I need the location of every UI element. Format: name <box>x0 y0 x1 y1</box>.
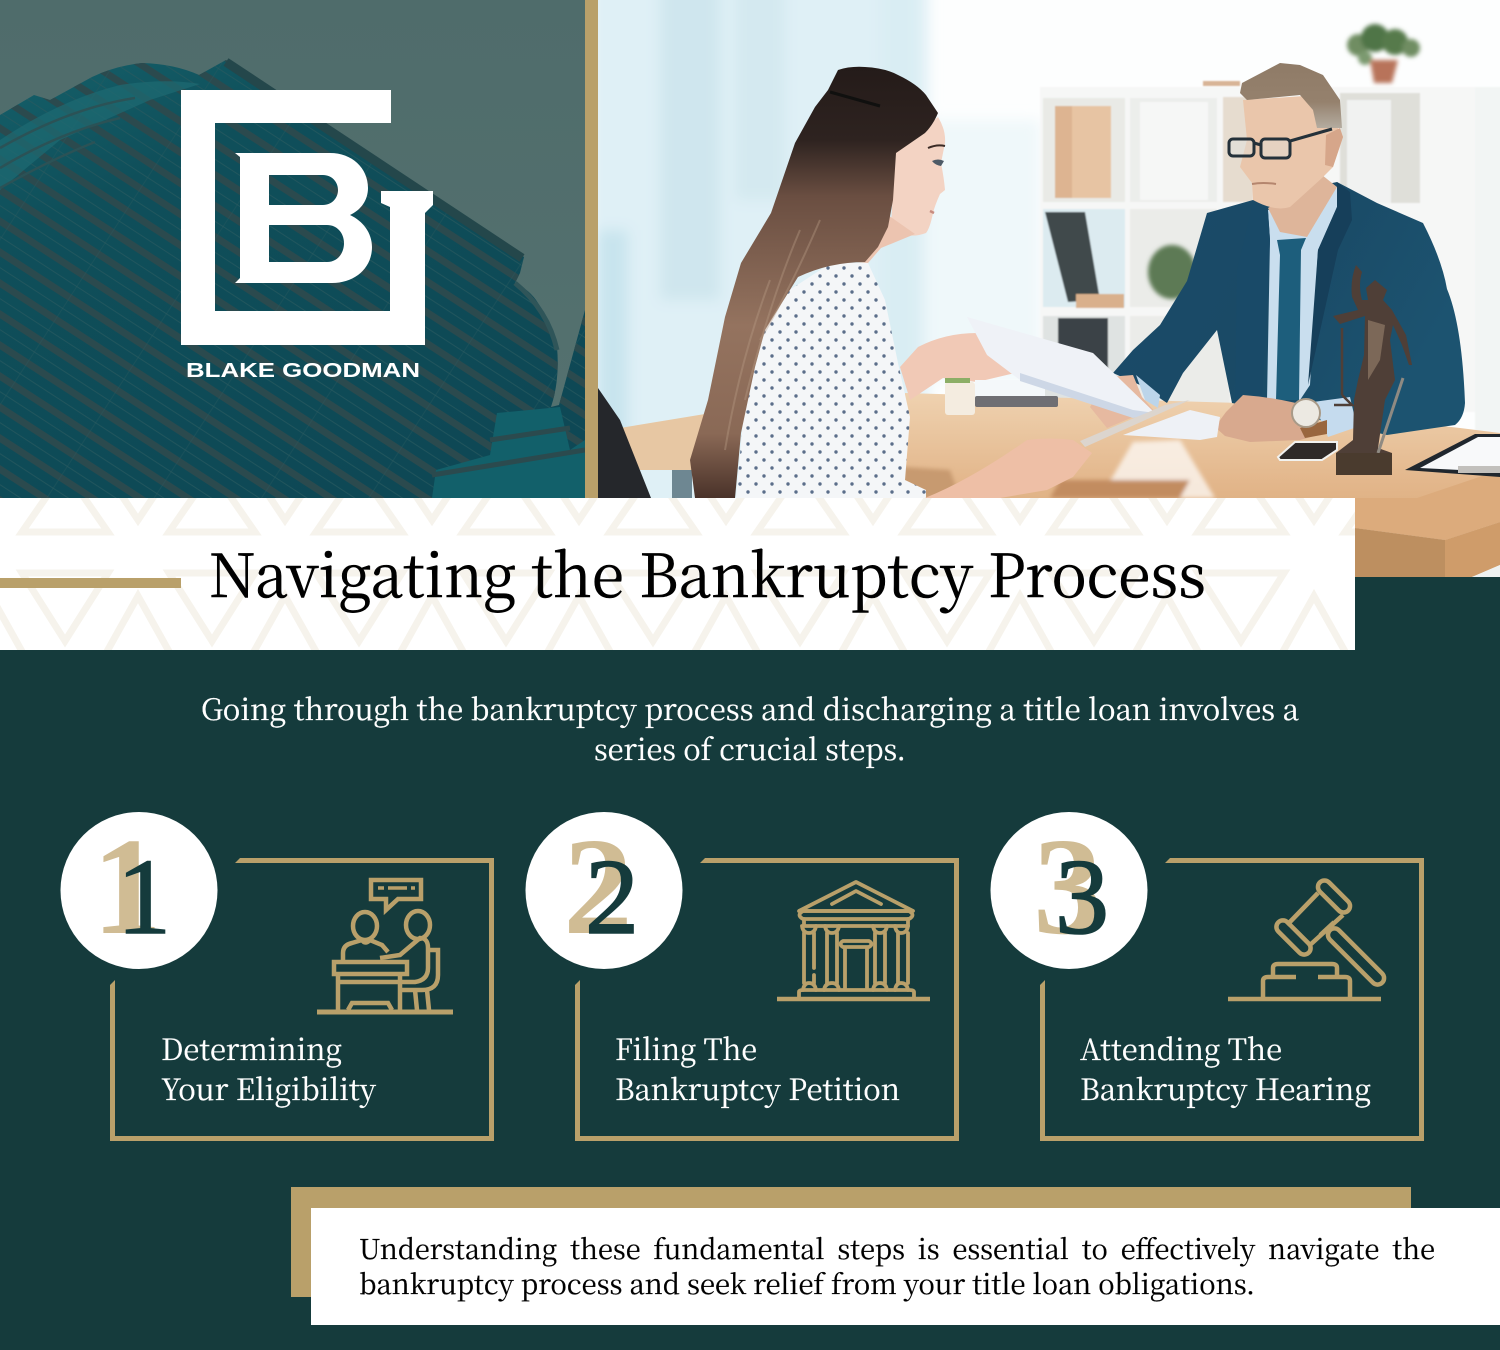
step 3 label: Bankruptcy Hearing <box>1080 1067 1371 1109</box>
summary text <box>359 1227 1435 1302</box>
face <box>891 117 945 236</box>
icon: meeting at desk <box>317 880 453 1012</box>
cup and laptop <box>945 378 1058 415</box>
step 1: determining eligibility <box>60 810 494 1141</box>
plant <box>1347 24 1420 83</box>
step 2 label: Bankruptcy Petition <box>615 1067 900 1109</box>
clipboard <box>1405 434 1500 477</box>
glasses <box>1229 129 1332 158</box>
documents <box>976 333 1220 447</box>
bookshelf <box>1040 81 1500 437</box>
number circle 1: 1 <box>92 810 162 964</box>
chair <box>598 388 651 498</box>
number circle 3: 3 <box>1055 838 1109 957</box>
step 2 label <box>615 1027 900 1109</box>
bush <box>1148 245 1196 299</box>
hair <box>690 67 938 498</box>
title: Navigating the Bankruptcy Process <box>209 529 1206 615</box>
number circle 2: 2 <box>563 810 633 964</box>
triangle pattern <box>0 498 1355 650</box>
hair <box>1240 63 1342 128</box>
summary text: Understanding these fundamental steps is essential to effectively navigate the <box>359 1227 1435 1267</box>
step 1 label: Your Eligibility <box>161 1067 377 1109</box>
callout: summary <box>291 1187 1500 1325</box>
cuff <box>1316 397 1354 437</box>
intro text: Going through the bankruptcy process and discharging a title loan involves a <box>201 687 1300 729</box>
hand on papers <box>1090 375 1155 428</box>
frame 1 <box>110 858 494 1141</box>
statue of justice <box>1333 265 1412 475</box>
panel: office photo <box>590 0 1500 577</box>
summary text: bankruptcy process and seek relief from your title loan obligations. <box>359 1262 1255 1302</box>
frame 2 <box>575 858 959 1141</box>
icon: courthouse <box>777 882 930 999</box>
gold divider stripe <box>585 0 598 498</box>
gold rule <box>0 578 181 588</box>
man <box>1090 63 1465 442</box>
number circle 1 <box>60 810 218 969</box>
number circle 3: 3 <box>1033 810 1103 964</box>
step 3 label: Attending The <box>1080 1027 1282 1069</box>
step 2 label: Filing The <box>615 1027 757 1069</box>
right hand <box>1218 395 1310 442</box>
icon: gavel <box>1228 878 1387 999</box>
logo: Blake Goodman: BLAKE GOODMAN <box>186 360 420 382</box>
woman <box>690 67 1015 498</box>
step 3: attending hearing <box>990 810 1424 1141</box>
panel: title band <box>0 498 1355 650</box>
desk reflection and shadow <box>903 440 1215 498</box>
step 1 label <box>161 1027 377 1109</box>
number circle 3 <box>990 810 1148 969</box>
step 1 label: Determining <box>161 1027 342 1069</box>
shirt <box>1267 187 1337 400</box>
desk <box>905 393 1500 540</box>
panel: building photo with logo <box>0 0 585 498</box>
step 3 label <box>1080 1027 1371 1109</box>
logo: Blake Goodman <box>181 90 433 382</box>
neck and face <box>1268 175 1337 237</box>
jacket <box>1113 182 1465 435</box>
number circle 2 <box>526 810 682 969</box>
intro text <box>201 687 1300 769</box>
lower hand <box>925 438 1092 498</box>
number circle 1: 1 <box>117 838 171 957</box>
step 2: filing petition <box>526 810 959 1141</box>
phone <box>1278 442 1337 460</box>
intro text: series of crucial steps. <box>594 727 906 769</box>
curtain <box>590 0 1040 520</box>
lapels <box>1268 212 1270 248</box>
tie <box>1276 238 1306 400</box>
blouse <box>736 263 926 498</box>
number circle 2: 2 <box>585 838 639 957</box>
frame 3 <box>1040 858 1424 1141</box>
